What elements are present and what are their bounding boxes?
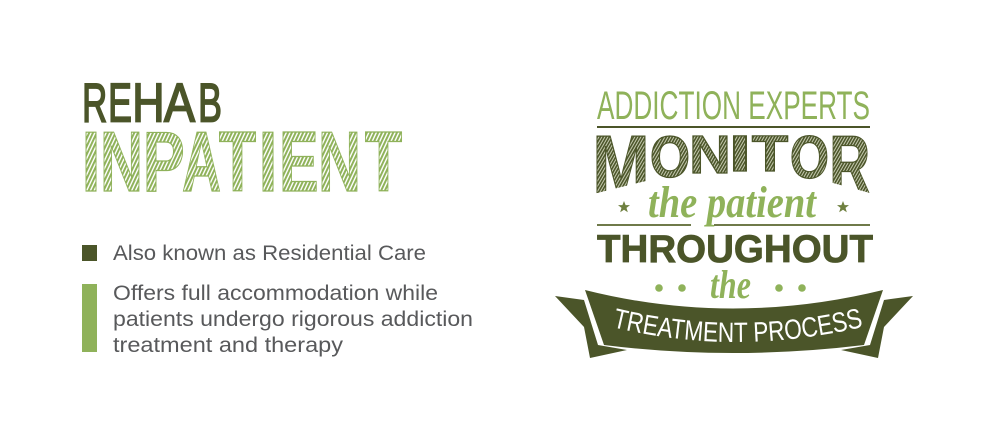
infographic: rehab inpatient	[82, 82, 913, 358]
heading: inpatient: N	[318, 115, 361, 210]
text: the patient: the patient	[648, 178, 818, 227]
ribbon: left tail	[555, 296, 627, 358]
text: monitor: O	[650, 125, 690, 190]
icon: right star	[837, 201, 849, 212]
text: throughout: THROUGHOUT	[597, 228, 873, 271]
banner ribbon	[555, 290, 913, 358]
heading: inpatient: T	[365, 115, 402, 210]
heading: inpatient: I	[81, 115, 101, 210]
heading: inpatient: A	[182, 115, 221, 210]
rule under addiction experts	[597, 126, 870, 128]
heading: rehab: A	[164, 72, 195, 134]
heading: inpatient: N	[100, 115, 143, 210]
bullet: green bar	[82, 284, 97, 352]
text: monitor: M	[592, 118, 650, 211]
heading: rehab: E	[108, 72, 132, 134]
text: description: patients undergo rigorous addiction	[113, 308, 473, 331]
ribbon: right tail	[841, 296, 913, 358]
heading: rehab	[82, 72, 222, 134]
text: description: Offers full accommodation while	[113, 282, 438, 305]
heading: inpatient	[81, 115, 402, 210]
heading: rehab: B	[198, 72, 222, 134]
text: monitor	[596, 135, 870, 194]
decorative dots	[655, 284, 806, 292]
text: monitor: N	[689, 125, 731, 185]
text: the: the	[710, 262, 751, 307]
icon: left star	[618, 201, 630, 212]
heading: inpatient: E	[279, 115, 319, 210]
panel: left	[81, 72, 473, 357]
heading: inpatient: I	[258, 115, 278, 210]
text: monitor: I	[728, 125, 752, 182]
ribbon: main band	[585, 290, 883, 353]
rule: left	[597, 224, 691, 226]
panel: right typographic badge	[555, 84, 913, 358]
text: also known as: Also known as Residential Care	[113, 242, 426, 265]
heading: rehab: R	[82, 72, 107, 134]
text: description	[113, 282, 473, 357]
text: monitor: R	[829, 118, 870, 211]
bullet: dark square	[82, 245, 97, 261]
text: description: treatment and therapy	[113, 334, 344, 357]
text: treatment process: TREATMENT PROCESS	[616, 308, 862, 342]
heading: inpatient: T	[219, 115, 256, 210]
rule: right	[714, 224, 870, 226]
text: monitor: T	[752, 125, 788, 182]
heading: rehab: H	[132, 72, 165, 134]
text: monitor: O	[790, 124, 829, 191]
heading: inpatient: P	[143, 115, 185, 210]
